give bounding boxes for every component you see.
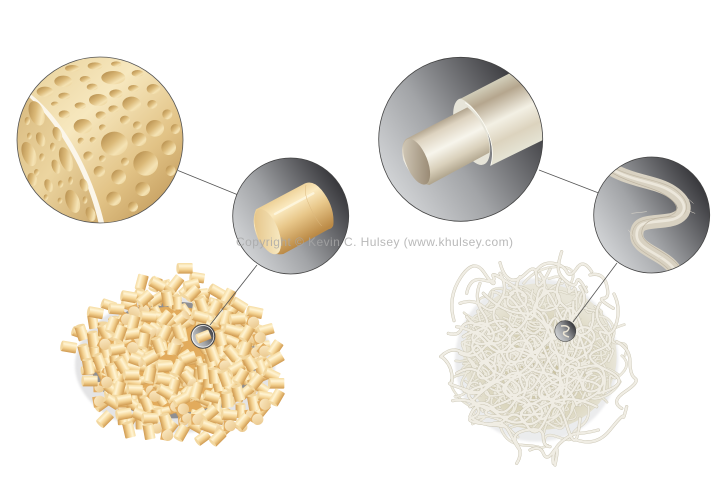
cut-away section with white edge — [18, 95, 104, 223]
magnified circle: fiber strand — [594, 157, 710, 273]
connector line: pore detail to pellet detail — [178, 170, 237, 194]
panel: left column, porous pellet — [0, 57, 349, 457]
magnified circle: single pellet — [233, 158, 349, 274]
fiber tangle — [417, 240, 661, 481]
small locator circle: strand in tangle — [555, 320, 576, 342]
magnified circle: porous surface — [16, 56, 184, 224]
panel: right column, fiber — [379, 57, 710, 481]
connector line: strand detail to fiber tangle — [573, 263, 617, 322]
magnified circle: rod in sleeve — [379, 57, 557, 221]
sleeve opening — [453, 98, 490, 165]
connector line: rod detail to strand detail — [539, 170, 598, 193]
pellet cylinder — [254, 182, 334, 254]
connector line: pellet detail to pellet pile — [210, 265, 257, 325]
copyright watermark: Copyright © Kevin C. Hulsey (www.khulsey.com) — [236, 235, 513, 249]
pellet pile — [56, 254, 290, 457]
small locator circle: pellet in pile — [191, 324, 215, 348]
outer sleeve — [461, 74, 542, 166]
holes on main surface — [37, 61, 180, 212]
inner rod — [402, 107, 490, 185]
